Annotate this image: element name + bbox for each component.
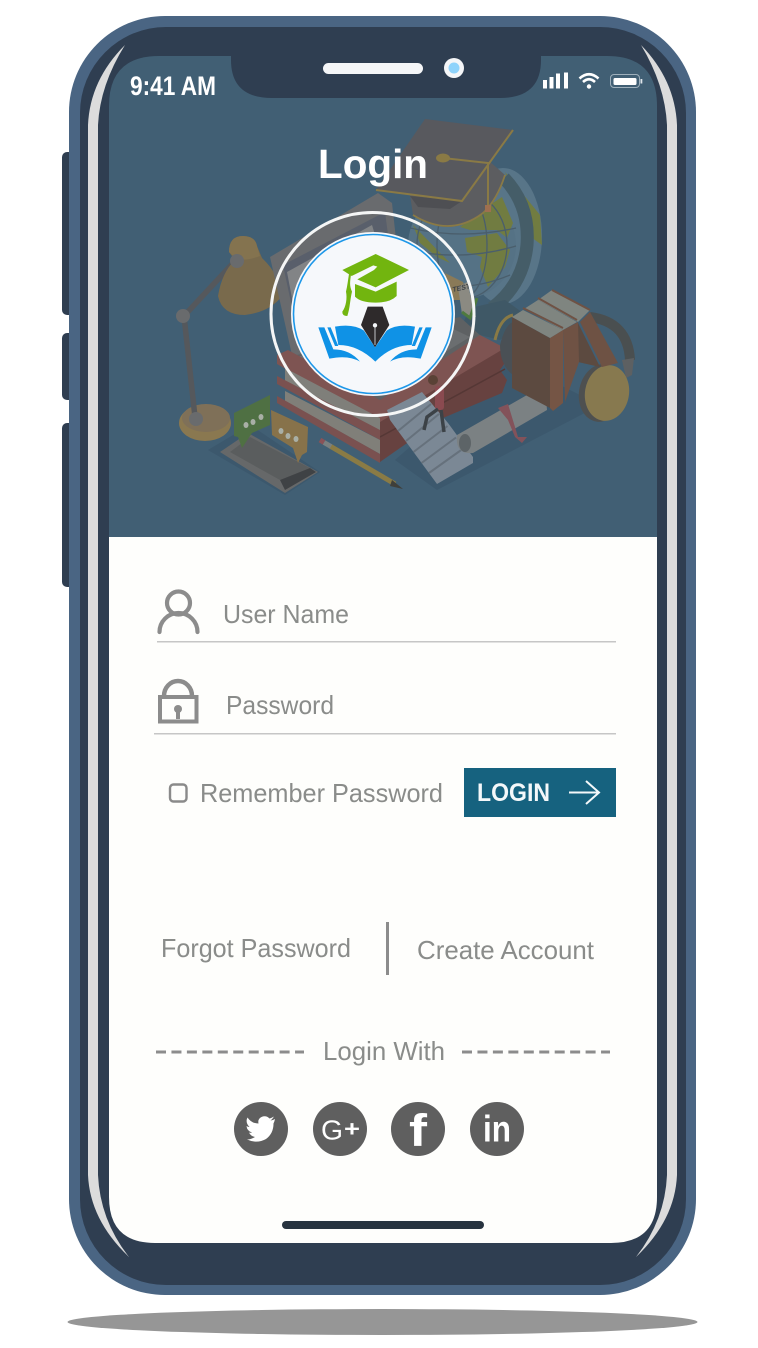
login button: LOGIN bbox=[477, 779, 550, 807]
icon: user bbox=[160, 592, 198, 632]
icon: facebook bbox=[391, 1102, 445, 1156]
phone shadow bbox=[68, 1309, 698, 1335]
illustration: graduation cap on globe bbox=[376, 119, 513, 227]
illustration: globe bbox=[408, 168, 542, 340]
icon: facebook: f bbox=[409, 1105, 428, 1156]
status icons bbox=[543, 72, 642, 89]
illustration: diploma scroll bbox=[457, 391, 547, 453]
illustration: study objects bbox=[176, 119, 634, 495]
icon: battery bbox=[610, 74, 642, 88]
illustration: headphones bbox=[495, 315, 634, 425]
login button bbox=[464, 768, 616, 817]
camera bbox=[444, 58, 464, 78]
status time: 9:41 AM bbox=[130, 71, 216, 101]
username underline bbox=[157, 641, 616, 642]
title: Login bbox=[318, 141, 428, 187]
icon: google plus: G bbox=[321, 1114, 343, 1146]
login with divider: Login With bbox=[323, 1036, 445, 1066]
illustration: brown books bbox=[512, 290, 618, 411]
password label: Password bbox=[226, 690, 334, 720]
icon: google plus: + bbox=[344, 1116, 360, 1142]
illustration: desk lamp bbox=[176, 236, 282, 441]
forgot password link: Forgot Password bbox=[161, 933, 351, 963]
icon: twitter bbox=[234, 1102, 288, 1156]
remember password label: Remember Password bbox=[200, 778, 443, 808]
logo: pen nib bbox=[361, 307, 389, 347]
icon: wifi bbox=[580, 74, 598, 89]
panel: screen header bbox=[109, 56, 657, 537]
logo: open book bbox=[318, 326, 432, 362]
icon: signal bars bbox=[543, 72, 568, 88]
create account link: Create Account bbox=[417, 935, 595, 965]
icon: linkedin bbox=[470, 1102, 524, 1156]
logo: graduation cap bbox=[342, 254, 409, 316]
illustration: test paper: TEST bbox=[452, 283, 472, 294]
logo: outer ring bbox=[271, 212, 474, 416]
illustration: chat bubbles bbox=[234, 395, 308, 463]
icon: padlock bbox=[160, 681, 196, 722]
illustration: pencil bbox=[320, 440, 403, 489]
phone body bbox=[69, 16, 696, 1295]
illustration: smartphone bbox=[220, 433, 318, 493]
icon: linkedin: in bbox=[483, 1108, 511, 1150]
checkbox bbox=[170, 784, 186, 802]
illustration: laptop bbox=[270, 193, 482, 405]
username label: User Name bbox=[223, 599, 349, 629]
social icons bbox=[234, 1102, 524, 1156]
icon: google plus bbox=[313, 1102, 367, 1156]
illustration: test paper bbox=[445, 273, 477, 318]
notch bbox=[231, 56, 541, 98]
password underline bbox=[154, 733, 616, 734]
panel: login form bbox=[109, 537, 657, 1243]
icon: arrow bbox=[569, 781, 599, 804]
logo: emblem bbox=[292, 233, 454, 395]
side buttons bbox=[62, 152, 76, 587]
home indicator bbox=[282, 1221, 484, 1229]
illustration: red book stack bbox=[277, 335, 507, 463]
divider bbox=[386, 922, 389, 975]
illustration: stairs and student bbox=[387, 375, 473, 484]
speaker bbox=[323, 63, 423, 74]
